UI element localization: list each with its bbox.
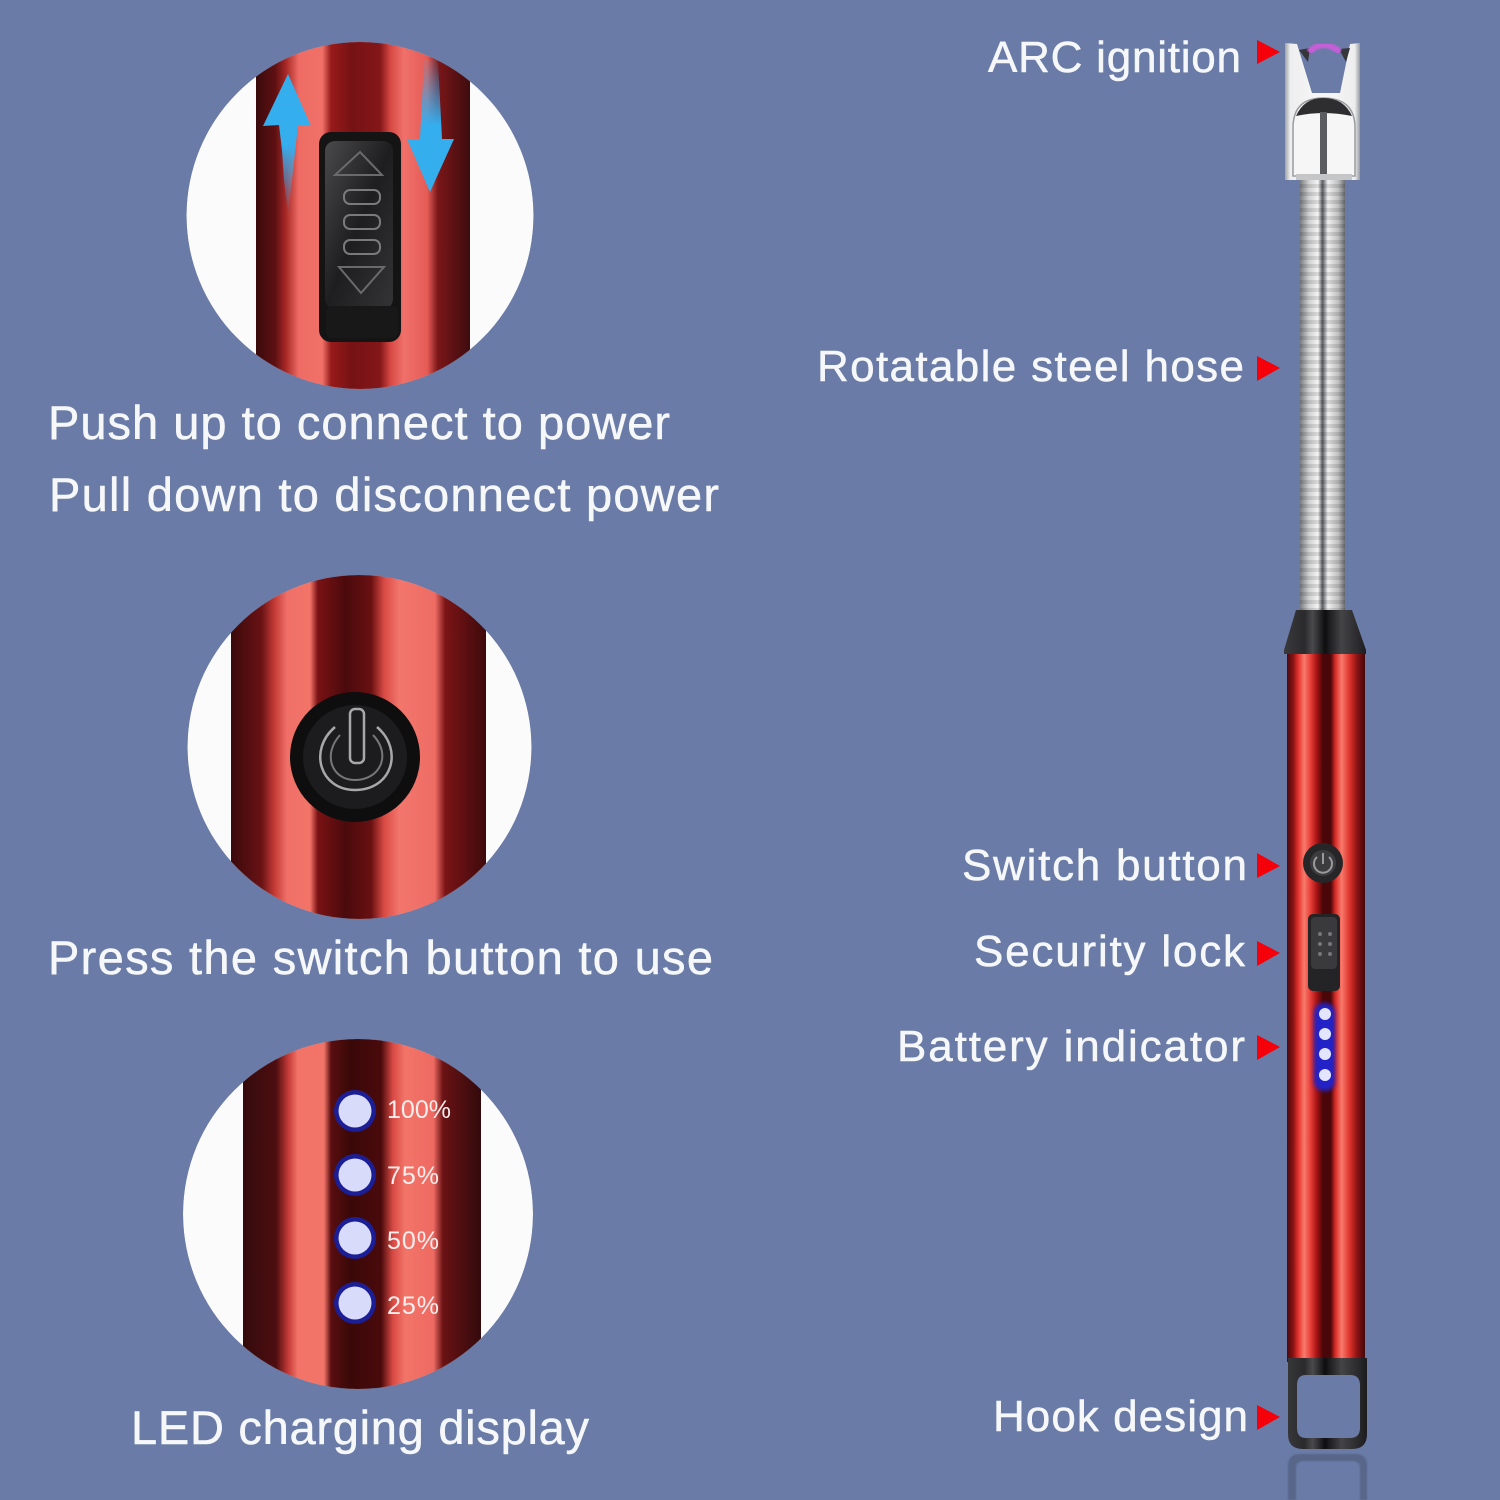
label: Rotatable steel hose: Rotatable steel hose: [817, 342, 1244, 391]
slider switch: [319, 132, 401, 342]
LED 25%: 25%: [387, 1292, 439, 1320]
lighter: security lock: [1308, 914, 1340, 991]
caption: push and pull instructions: [48, 396, 719, 521]
LED 100%: [334, 1090, 451, 1132]
label: Hook design: Hook design: [993, 1392, 1248, 1441]
icon: power button: [290, 692, 420, 822]
lighter: black collar: [1284, 610, 1366, 654]
LED 75%: 75%: [387, 1162, 439, 1190]
arc spark: [1309, 45, 1340, 52]
label: Switch button: Switch button: [962, 841, 1247, 890]
panel: slide safety lock close-up: [186, 30, 534, 400]
caption: push and pull instructions: Push up to connect to power: [48, 396, 670, 449]
LED 75%: [334, 1154, 439, 1196]
label: Battery indicator: Battery indicator: [897, 1022, 1245, 1071]
label: ARC ignition: ARC ignition: [988, 33, 1241, 82]
caption: push and pull instructions: Pull down to disconnect power: [49, 468, 719, 521]
LED 25%: [334, 1282, 439, 1324]
LED 100%: 100%: [387, 1096, 451, 1124]
lighter: battery indicator: [1314, 1003, 1335, 1091]
caption: switch button: Press the switch button to use: [48, 931, 713, 984]
label: Security lock: Security lock: [974, 927, 1246, 976]
icon: up arrow: [263, 74, 311, 215]
icon: down arrow: [407, 60, 454, 192]
lighter: hook reflection: [1288, 1454, 1367, 1500]
lighter: steel hose: [1300, 178, 1345, 613]
caption: LED charging display: LED charging display: [131, 1401, 590, 1454]
LED 50%: [334, 1217, 439, 1259]
lighter: hook: [1288, 1358, 1367, 1449]
lighter: switch button: [1303, 843, 1343, 883]
LED 50%: 50%: [387, 1227, 439, 1255]
panel: LED charging display close-up: [183, 1030, 533, 1400]
panel: switch button close-up: [188, 560, 532, 930]
product: arc lighter: [1284, 43, 1367, 1500]
lighter: metal head: [1285, 43, 1360, 180]
lighter: red body: [1287, 648, 1365, 1362]
